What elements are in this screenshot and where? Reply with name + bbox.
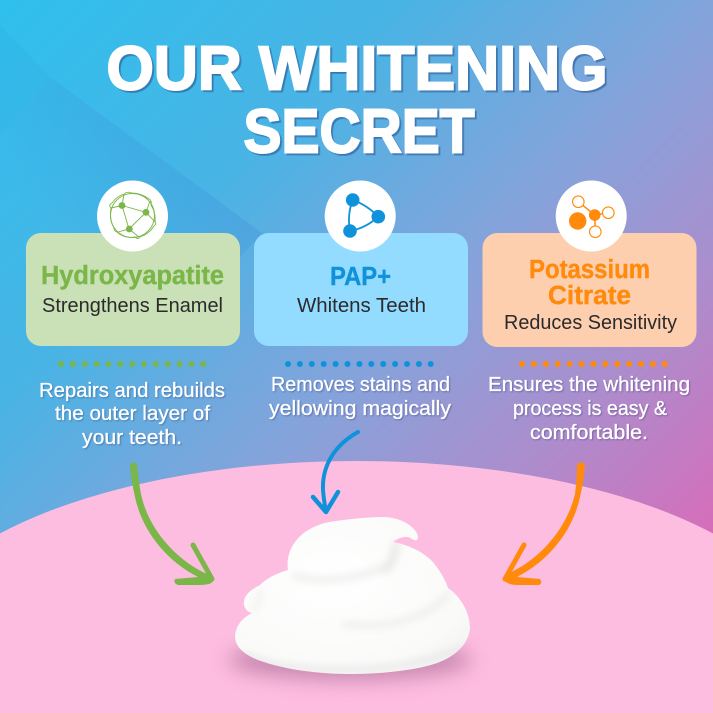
heading: potassium citrate: Citrate: [548, 282, 631, 310]
dotted divider: blue: [285, 361, 434, 367]
pink ground arc: [0, 461, 713, 713]
heading: hydroxyapatite: Hydroxyapatite: [41, 262, 224, 290]
text block: pap+ description: yellowing magically: [269, 398, 451, 420]
panel: pap+: [254, 233, 468, 346]
foam shading: [250, 542, 417, 672]
text block: hydroxyapatite description: the outer layer of: [55, 403, 210, 425]
title: [106, 34, 610, 168]
arrow: green: [130, 462, 213, 585]
text block: hydroxyapatite description: [39, 380, 225, 449]
text block: potassium citrate description: [488, 374, 690, 444]
text block: pap+ description: [269, 374, 451, 420]
text block: hydroxyapatite description: your teeth.: [82, 427, 182, 449]
arrow: orange: [503, 462, 585, 585]
text block: potassium citrate description: process is easy &: [513, 398, 668, 420]
heading: potassium citrate: [529, 256, 650, 310]
panel: hydroxyapatite: [26, 233, 240, 346]
heading: pap+: PAP+: [330, 263, 391, 291]
title: SECRET: [246, 100, 477, 168]
text block: pap+ description: Removes stains and: [271, 374, 450, 396]
text block: potassium citrate description: Ensures the whitening: [488, 374, 690, 396]
arrow: blue: [313, 432, 358, 512]
text block: hydroxyapatite description: Repairs and rebuilds: [39, 380, 225, 402]
title: OUR WHITENING: [106, 34, 608, 104]
subheading: reduces sensitivity: Reduces Sensitivity: [504, 312, 677, 334]
icon: pap+ triangle: [325, 180, 396, 252]
dotted divider: green: [58, 361, 206, 367]
title: OUR WHITENING: [108, 36, 610, 106]
icon: potassium citrate molecule: [556, 180, 627, 252]
icon: hydroxyapatite molecule: [97, 180, 168, 252]
subheading: whitens teeth: Whitens Teeth: [297, 295, 426, 317]
heading: potassium citrate: Potassium: [529, 256, 650, 284]
subheading: strengthens enamel: Strengthens Enamel: [42, 295, 223, 317]
foam shadow: [228, 640, 472, 680]
foam: whitening mousse: [235, 517, 470, 674]
dotted divider: orange: [519, 361, 668, 367]
panel: potassium citrate: [482, 233, 696, 347]
title: SECRET: [244, 98, 475, 166]
text block: potassium citrate description: comfortable.: [530, 422, 648, 444]
